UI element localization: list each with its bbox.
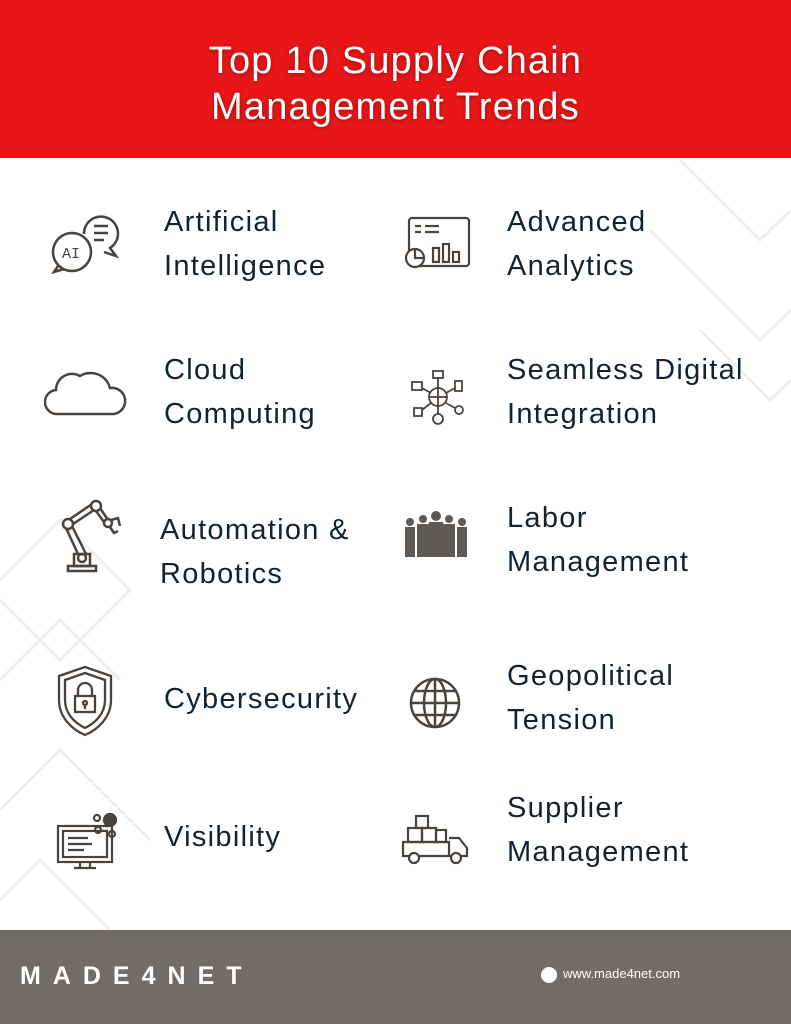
icon: monitor with gears [56,812,118,870]
icon: digital integration network [411,370,464,425]
item: Labor Management [507,502,689,578]
item: Seamless Digital Integration: Seamless Digital [507,354,744,386]
item: Artificial Intelligence: Intelligence [164,250,326,282]
icon: cloud [44,372,126,416]
icon: delivery truck [402,814,468,864]
item: Artificial Intelligence: Artificial [164,206,279,238]
item: Cybersecurity: Cybersecurity [164,683,358,715]
item: Supplier Management: Supplier [507,792,624,824]
item: Advanced Analytics: Analytics [507,250,635,282]
item: Geopolitical Tension [507,660,674,736]
item: Visibility: Visibility [164,821,281,853]
item: Supplier Management: Management [507,836,689,868]
item: Automation & Robotics: Robotics [160,558,283,590]
title: Management Trends [211,86,580,128]
item: Cloud Computing: Computing [164,398,316,430]
item: Cloud Computing [164,354,316,430]
item: Artificial Intelligence [164,206,326,282]
item: Geopolitical Tension: Tension [507,704,616,736]
logo: MADE4NET [20,962,254,990]
icon: AI chat bubbles [51,215,120,274]
header banner [0,0,791,158]
icon: globe [410,678,460,728]
icon: workers group [405,511,467,557]
footer bar [0,930,791,1024]
item: Automation & Robotics: Automation & [160,514,350,546]
item: Labor Management: Management [507,546,689,578]
item: Advanced Analytics: Advanced [507,206,646,238]
item: Seamless Digital Integration [507,354,744,430]
item: Geopolitical Tension: Geopolitical [507,660,674,692]
icon: analytics dashboard [404,216,470,268]
item: Supplier Management [507,792,689,868]
icon: shield with lock [58,666,112,736]
item: Labor Management: Labor [507,502,588,534]
title [208,40,582,130]
item: Automation & Robotics [160,514,350,590]
title: Top 10 Supply Chain [209,40,582,82]
icon: robotic arm [62,500,122,572]
icon: AI chat bubbles: AI [62,246,80,263]
item: Advanced Analytics [507,206,646,282]
item: Seamless Digital Integration: Integration [507,398,658,430]
item: Cloud Computing: Cloud [164,354,246,386]
website link: www.made4net.com [563,966,680,981]
